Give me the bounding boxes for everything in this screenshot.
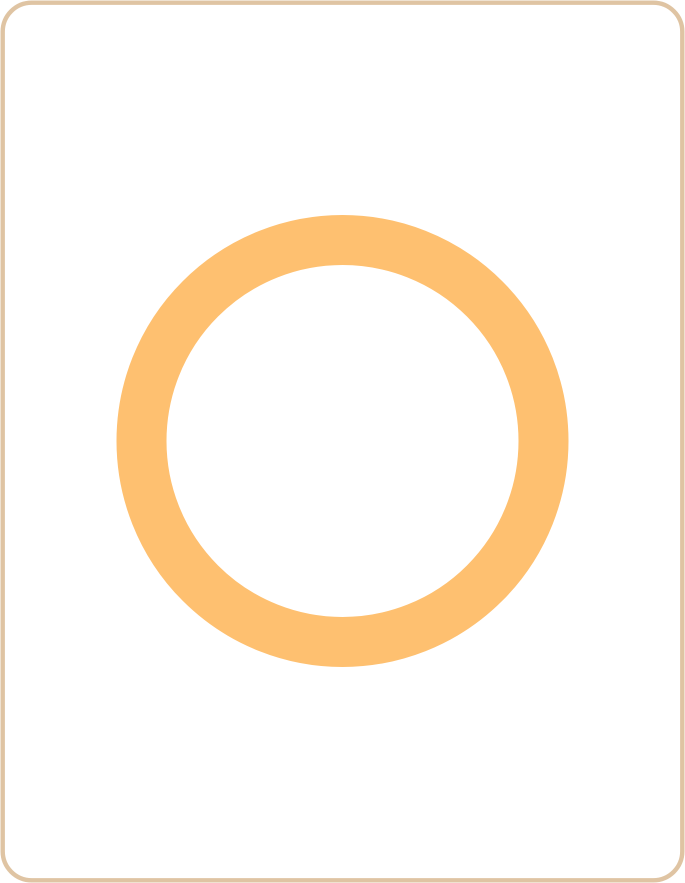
chart: orange ring	[142, 240, 544, 642]
